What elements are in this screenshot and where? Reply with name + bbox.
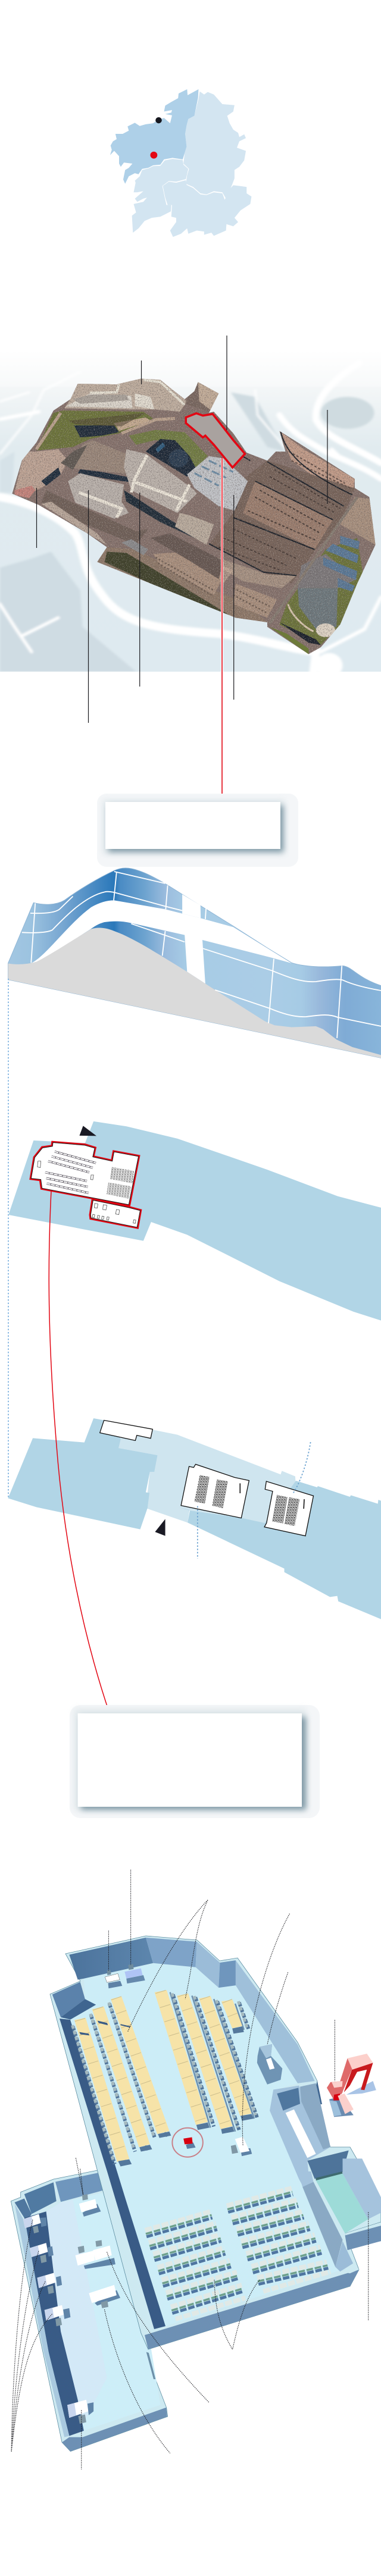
desks xyxy=(40,2204,120,2415)
seating rows: shadows xyxy=(146,2195,328,2314)
central pond xyxy=(129,430,208,470)
chairs along tables xyxy=(73,1994,257,2164)
leader lines: aerial labels xyxy=(37,336,327,723)
corridor end panels xyxy=(302,2182,343,2267)
seating rows: green backs xyxy=(146,2192,327,2311)
podium with red circle xyxy=(172,2128,203,2157)
red connector to first callout xyxy=(221,457,223,802)
dotted guide: section to plans xyxy=(8,979,9,1497)
aerial photo: island of buildings xyxy=(0,377,381,659)
desk lilac top xyxy=(126,1975,145,1983)
province: Ourense xyxy=(163,180,251,237)
building A xyxy=(100,1420,152,1440)
plan: right blue zone xyxy=(179,1481,381,1619)
province: Lugo xyxy=(183,92,246,199)
province: Pontevedra xyxy=(132,159,188,233)
booth xyxy=(257,2044,282,2085)
corridor panels xyxy=(270,2086,330,2201)
dotted guides xyxy=(198,1442,311,1559)
3D floor plan of venue xyxy=(11,1870,381,2470)
callout: first text box xyxy=(97,794,298,867)
highlighted building with red outline xyxy=(186,413,245,468)
hall walls xyxy=(50,1936,381,2349)
building B xyxy=(181,1464,249,1518)
photo background terrain xyxy=(0,387,381,672)
province: A Coruna highlighted xyxy=(110,89,198,184)
annex door recess xyxy=(146,2352,155,2379)
west plaza xyxy=(14,449,68,493)
table dividers xyxy=(80,1992,246,2161)
inner wall faces xyxy=(69,1938,153,1980)
yellow tables: shadows xyxy=(85,1992,254,2164)
aerial photo panel xyxy=(0,378,381,672)
marker: black dot xyxy=(155,117,162,123)
central roofs xyxy=(124,449,197,513)
view arrow xyxy=(155,1519,165,1536)
teal room xyxy=(316,2173,368,2233)
desk white top xyxy=(108,1981,122,1988)
leader lines: hall xyxy=(76,1870,335,2195)
red connector to second callout xyxy=(49,1191,110,1713)
callout: second text box xyxy=(70,1705,320,1818)
annex room xyxy=(11,2169,168,2452)
west buildings xyxy=(74,440,126,474)
hall floor xyxy=(61,1963,339,2326)
main hall outline xyxy=(30,1142,139,1205)
red reception desk xyxy=(327,2081,354,2117)
south-east corner xyxy=(279,538,364,645)
plan: site blue xyxy=(8,1121,381,1321)
table end legs xyxy=(118,2026,254,2166)
roof section illustration xyxy=(8,868,381,1058)
lower floor plan xyxy=(8,1418,381,1619)
north-west park xyxy=(36,410,153,450)
roof white gaps xyxy=(32,894,292,983)
map of Galicia xyxy=(110,89,251,237)
seating blocks xyxy=(110,1167,134,1183)
hall shadow by corridor xyxy=(311,2081,322,2104)
annex shadow band xyxy=(24,2211,84,2436)
north buildings xyxy=(64,379,187,412)
roof surface xyxy=(8,868,381,1058)
view arrow xyxy=(79,1126,96,1136)
yellow tables xyxy=(74,1990,251,2162)
red entrance arch xyxy=(340,2054,376,2095)
marker: red dot xyxy=(150,152,157,159)
annex floor xyxy=(46,2192,160,2431)
leader lines: annex and seating xyxy=(11,2169,368,2470)
seating rows: seats xyxy=(145,2188,330,2319)
glass building xyxy=(187,456,248,510)
south green strip xyxy=(97,547,267,622)
annex walls xyxy=(11,2169,168,2452)
teal room wall xyxy=(307,2151,349,2179)
roof panel joints xyxy=(22,872,381,1038)
plan: light stippled zone xyxy=(105,1420,296,1523)
upper floor plan xyxy=(8,1121,381,1321)
table rows xyxy=(45,1152,96,1193)
hall bottom wall xyxy=(145,2270,359,2349)
grey building mass xyxy=(8,927,381,1058)
hall shadow band xyxy=(60,2019,165,2329)
building C xyxy=(264,1481,314,1536)
white desk xyxy=(231,2137,252,2156)
south-east plots xyxy=(209,460,355,584)
plan: left blue zone xyxy=(8,1418,157,1530)
annex outline xyxy=(90,1199,141,1228)
annex side wall xyxy=(14,2204,69,2437)
